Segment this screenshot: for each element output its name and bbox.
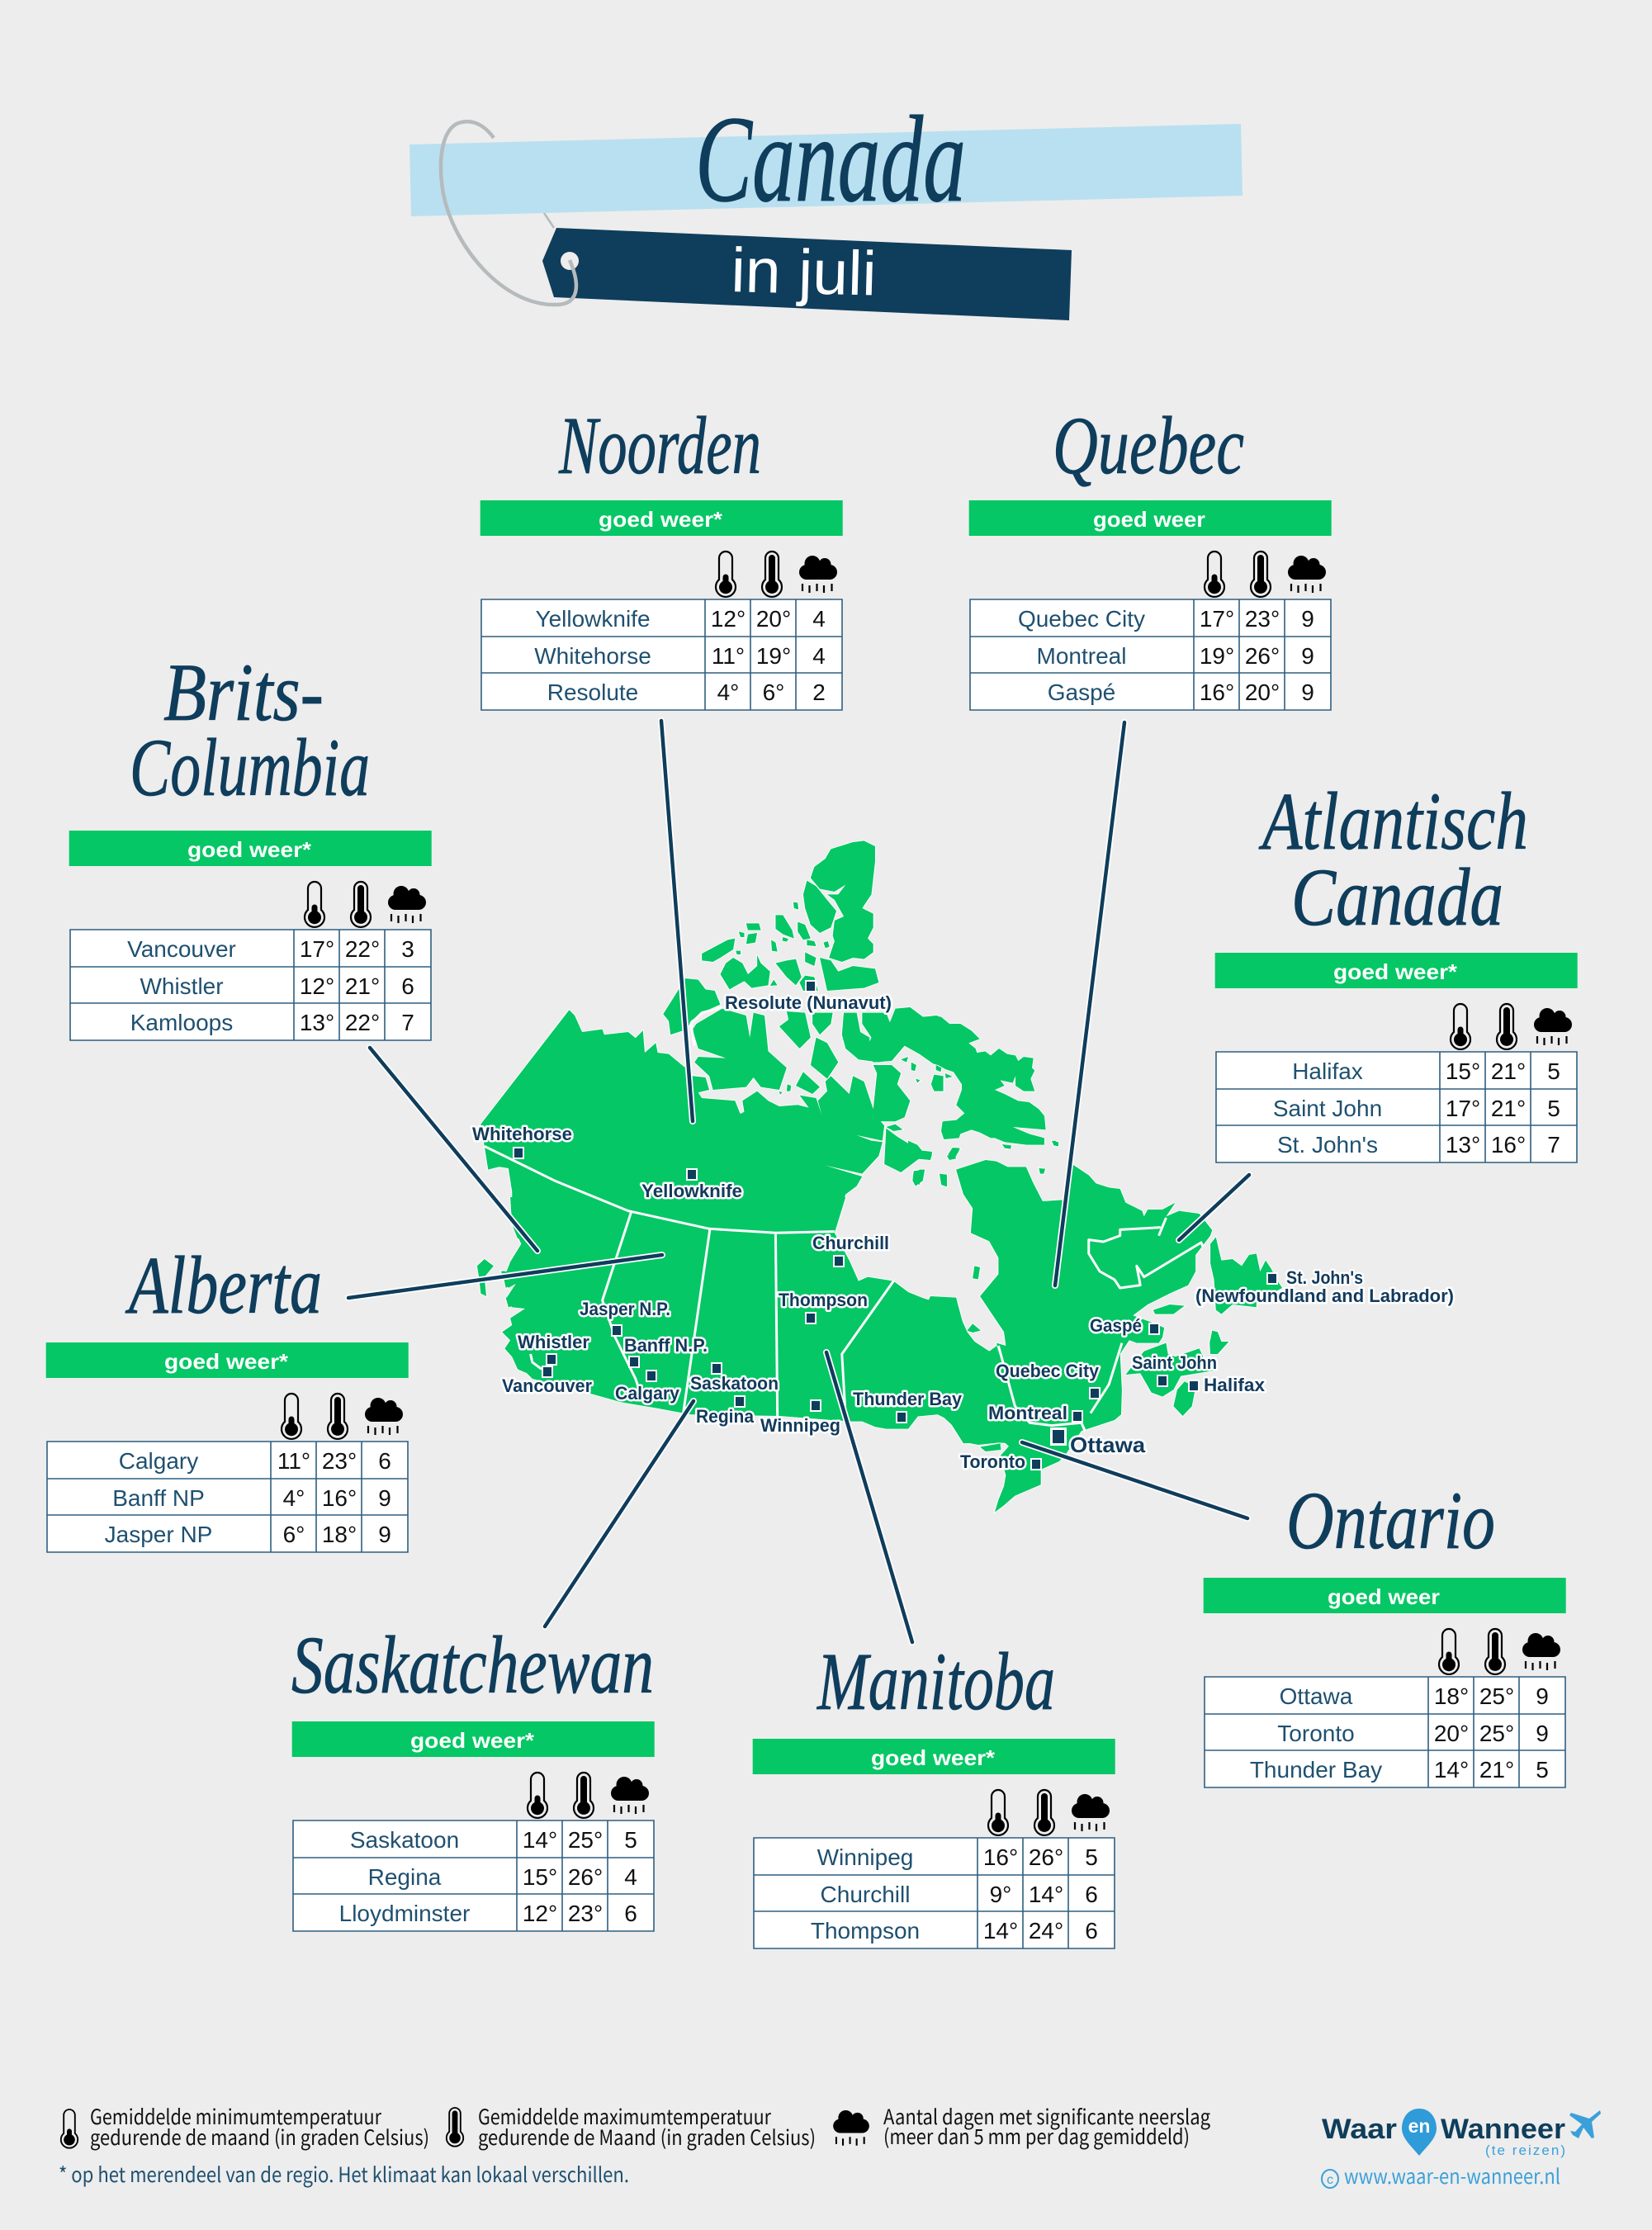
- weather block: 18°: [322, 1522, 357, 1547]
- weather block: goed weer: [1328, 1584, 1440, 1609]
- weather block: Montreal: [1037, 643, 1126, 669]
- weather block: 5: [624, 1827, 637, 1853]
- weather block: goed weer*: [164, 1349, 289, 1374]
- weather block: Resolute: [547, 679, 638, 705]
- city labels: Quebec City: [996, 1361, 1100, 1381]
- city labels: Regina: [696, 1406, 755, 1427]
- weather block: Whistler: [140, 973, 224, 999]
- city labels: Banff N.P.: [624, 1335, 708, 1356]
- weather block: 13°: [300, 1010, 334, 1035]
- province borders: [485, 1007, 1203, 1431]
- weather block: 4: [812, 643, 826, 669]
- weather block: 16°: [1491, 1132, 1526, 1158]
- logo: Waar en Wanneer: [1322, 2109, 1601, 2190]
- legend: maximum temperature: gedurende de Maand (in graden Celsius): [478, 2122, 816, 2152]
- weather block: 15°: [1446, 1058, 1480, 1084]
- weather block: 19°: [756, 643, 791, 669]
- legend: minimum temperature: gedurende de maand (in graden Celsius): [90, 2122, 429, 2152]
- city labels: Calgary: [615, 1383, 680, 1404]
- weather block: 21°: [1479, 1757, 1514, 1783]
- weather block: 20°: [756, 606, 791, 632]
- logo: Waar en Wanneer: www.waar-en-wanneer.nl: [1344, 2161, 1560, 2190]
- city labels: Jasper N.P.: [580, 1299, 670, 1319]
- city labels: Saint John: [1132, 1352, 1217, 1373]
- weather block: 4: [624, 1864, 637, 1890]
- weather block: 26°: [1029, 1844, 1063, 1870]
- weather block: 25°: [568, 1827, 603, 1853]
- weather block: 9°: [990, 1882, 1011, 1907]
- tag hole: [561, 252, 579, 270]
- icon: plane: [1569, 2110, 1601, 2138]
- weather block: Churchill: [821, 1882, 910, 1907]
- weather block: 12°: [523, 1901, 557, 1926]
- city labels: Whistler: [518, 1332, 589, 1352]
- city labels: Yellowknife: [641, 1181, 742, 1201]
- city labels: Saskatoon: [690, 1373, 779, 1394]
- weather block: 16°: [1200, 679, 1234, 705]
- weather block: 17°: [1200, 606, 1234, 632]
- weather block: 6: [401, 973, 414, 999]
- city labels: Montreal: [988, 1403, 1067, 1423]
- panel: Noorden: [480, 400, 843, 710]
- weather block: 5: [1085, 1844, 1098, 1870]
- logo: Waar en Wanneer: c: [1327, 2173, 1333, 2187]
- weather block: Yellowknife: [535, 606, 651, 632]
- city labels: (Newfoundland and Labrador): [1195, 1285, 1454, 1306]
- weather block: goed weer*: [599, 507, 723, 532]
- weather block: 6: [1085, 1882, 1098, 1907]
- weather block: Gaspé: [1048, 679, 1115, 705]
- legend: minimum temperature: Gemiddelde minimumtemperatuur: [90, 2101, 381, 2131]
- weather block: [1215, 953, 1578, 1162]
- heading: Alberta: [125, 1239, 322, 1331]
- weather block: 24°: [1029, 1918, 1063, 1944]
- weather block: 11°: [277, 1448, 310, 1474]
- panel: Saskatchewan: [291, 1619, 655, 1931]
- weather block: 6: [378, 1448, 391, 1474]
- weather block: Toronto: [1277, 1721, 1355, 1746]
- weather block: 15°: [523, 1864, 557, 1890]
- city labels: Vancouver: [502, 1375, 592, 1396]
- logo: Waar en Wanneer: Wanneer: [1441, 2114, 1565, 2145]
- weather block: Thompson: [811, 1918, 920, 1944]
- city labels: Thompson: [779, 1290, 868, 1310]
- weather block: [292, 1721, 655, 1931]
- weather block: 23°: [1245, 606, 1280, 632]
- weather block: 18°: [1434, 1683, 1469, 1709]
- city labels: Churchill: [812, 1233, 889, 1253]
- weather block: 9: [1536, 1683, 1549, 1709]
- weather block: 4: [812, 606, 826, 632]
- weather block: Winnipeg: [817, 1844, 913, 1870]
- weather block: 19°: [1200, 643, 1234, 669]
- weather block: 21°: [1491, 1096, 1526, 1121]
- connector lines: [348, 721, 1249, 1642]
- weather block: Quebec City: [1018, 606, 1145, 632]
- weather block: 22°: [345, 1010, 380, 1035]
- weather block: 12°: [300, 973, 334, 999]
- weather block: 9: [378, 1522, 391, 1547]
- city labels: Toronto: [960, 1451, 1025, 1472]
- weather block: 26°: [1245, 643, 1280, 669]
- weather block: 6: [1085, 1918, 1098, 1944]
- weather block: 25°: [1479, 1721, 1514, 1746]
- legend: precipitation: Aantal dagen met significante neerslag: [883, 2101, 1210, 2131]
- weather block: 13°: [1446, 1132, 1480, 1158]
- heading: Saskatchewan: [291, 1619, 654, 1711]
- weather block: 17°: [300, 936, 334, 962]
- weather block: [480, 500, 843, 710]
- weather block: Saint John: [1273, 1096, 1382, 1121]
- weather block: 21°: [1491, 1058, 1526, 1084]
- weather block: [969, 500, 1332, 710]
- logo: Waar en Wanneer: Waar: [1322, 2114, 1397, 2145]
- weather block: goed weer*: [871, 1745, 996, 1770]
- city labels: Thunder Bay: [853, 1389, 963, 1409]
- logo: Waar en Wanneer: en: [1408, 2115, 1430, 2137]
- weather block: 6°: [283, 1522, 305, 1547]
- panel: Brits-Columbia: [69, 646, 432, 1040]
- weather block: goed weer: [1093, 507, 1205, 532]
- weather block: [1204, 1578, 1566, 1787]
- city labels: Whitehorse: [472, 1124, 572, 1144]
- weather block: Kamloops: [130, 1010, 233, 1035]
- weather block: 9: [1301, 606, 1314, 632]
- heading: Ontario: [1286, 1475, 1495, 1566]
- weather block: Saskatoon: [350, 1827, 459, 1853]
- weather block: 14°: [983, 1918, 1018, 1944]
- legend: maximum temperature: [447, 2101, 816, 2152]
- panel: Atlantisch Canada: [1215, 775, 1578, 1162]
- weather block: Calgary: [119, 1448, 198, 1474]
- weather block: Lloydminster: [339, 1901, 470, 1926]
- weather block: 20°: [1434, 1721, 1469, 1746]
- panel: Ontario: [1204, 1475, 1566, 1787]
- city markers: [513, 980, 1278, 1470]
- weather block: goed weer*: [410, 1728, 535, 1753]
- weather block: 5: [1547, 1058, 1560, 1084]
- weather block: 7: [401, 1010, 414, 1035]
- heading: Brits-: [163, 646, 324, 738]
- weather block: goed weer*: [1333, 959, 1458, 984]
- heading: [130, 646, 370, 813]
- weather block: 12°: [711, 606, 746, 632]
- weather block: 23°: [568, 1901, 603, 1926]
- website: [1322, 2170, 1338, 2188]
- weather block: 17°: [1446, 1096, 1480, 1121]
- legend: precipitation: (meer dan 5 mm per dag gemiddeld): [883, 2121, 1190, 2151]
- weather block: 3: [401, 936, 414, 962]
- city labels: Resolute (Nunavut): [725, 992, 892, 1013]
- weather block: 26°: [568, 1864, 603, 1890]
- footnote: * op het merendeel van de regio. Het klimaat kan lokaal verschillen.: [59, 2159, 629, 2189]
- light blue band: [409, 124, 1243, 216]
- city labels: Winnipeg: [760, 1415, 840, 1436]
- weather block: 5: [1536, 1757, 1549, 1783]
- weather block: 9: [1301, 643, 1314, 669]
- legend: minimum temperature: [61, 2101, 429, 2152]
- city labels: Halifax: [1204, 1375, 1266, 1395]
- map of Canada: [348, 721, 1454, 1642]
- weather block: Thunder Bay: [1250, 1757, 1382, 1783]
- tag string: [441, 121, 576, 305]
- panel: Quebec: [969, 400, 1332, 710]
- map pin: [1402, 2109, 1437, 2156]
- subtitle: in juli: in juli: [731, 235, 878, 310]
- weather block: 14°: [1029, 1882, 1063, 1907]
- city labels: Gaspé: [1090, 1315, 1142, 1336]
- weather block: 11°: [712, 643, 745, 669]
- weather block: St. John's: [1277, 1132, 1378, 1158]
- weather block: 5: [1547, 1096, 1560, 1121]
- title banner: [409, 91, 1243, 320]
- heading: Noorden: [558, 400, 761, 491]
- weather block: 16°: [983, 1844, 1018, 1870]
- city labels: [472, 992, 1454, 1472]
- luggage tag: [542, 228, 1072, 320]
- panel: Manitoba: [753, 1636, 1115, 1948]
- weather block: 4°: [717, 679, 739, 705]
- weather block: 23°: [322, 1448, 357, 1474]
- title: Canada: Canada: [695, 91, 966, 228]
- weather block: 16°: [322, 1485, 357, 1511]
- heading: Canada: [1291, 851, 1503, 943]
- city labels: St. John's: [1286, 1267, 1363, 1288]
- weather block: Ottawa: [1280, 1683, 1353, 1709]
- weather block: 2: [812, 679, 826, 705]
- weather block: 21°: [345, 973, 380, 999]
- legend: [59, 2101, 1210, 2189]
- weather block: Halifax: [1292, 1058, 1363, 1084]
- weather block: Vancouver: [127, 936, 236, 962]
- weather block: 14°: [1434, 1757, 1469, 1783]
- weather block: 7: [1547, 1132, 1560, 1158]
- legend: precipitation: [833, 2101, 1210, 2151]
- panel: Alberta: [46, 1239, 409, 1552]
- weather block: [753, 1739, 1115, 1948]
- weather block: 6: [624, 1901, 637, 1926]
- weather block: Jasper NP: [105, 1522, 212, 1547]
- legend: maximum temperature: Gemiddelde maximumtemperatuur: [478, 2101, 771, 2131]
- heading: Columbia: [130, 722, 370, 813]
- weather block: 22°: [345, 936, 380, 962]
- weather block: 20°: [1245, 679, 1280, 705]
- heading: Atlantisch: [1258, 775, 1528, 867]
- weather block: Banff NP: [112, 1485, 205, 1511]
- weather block: goed weer*: [187, 837, 312, 862]
- weather block: 9: [1301, 679, 1314, 705]
- weather block: Whitehorse: [534, 643, 651, 669]
- heading: Quebec: [1053, 400, 1244, 491]
- weather block: 9: [378, 1485, 391, 1511]
- weather block: Regina: [368, 1864, 442, 1890]
- weather block: 4°: [283, 1485, 305, 1511]
- city labels: Ottawa: [1070, 1432, 1146, 1457]
- heading: [1258, 775, 1528, 943]
- weather block: [69, 831, 432, 1040]
- weather block: 14°: [523, 1827, 557, 1853]
- weather block: 25°: [1479, 1683, 1514, 1709]
- weather block: 9: [1536, 1721, 1549, 1746]
- logo: Waar en Wanneer: (te reizen): [1485, 2142, 1565, 2158]
- weather block: 6°: [763, 679, 784, 705]
- heading: Manitoba: [817, 1636, 1055, 1727]
- weather block: [46, 1342, 409, 1552]
